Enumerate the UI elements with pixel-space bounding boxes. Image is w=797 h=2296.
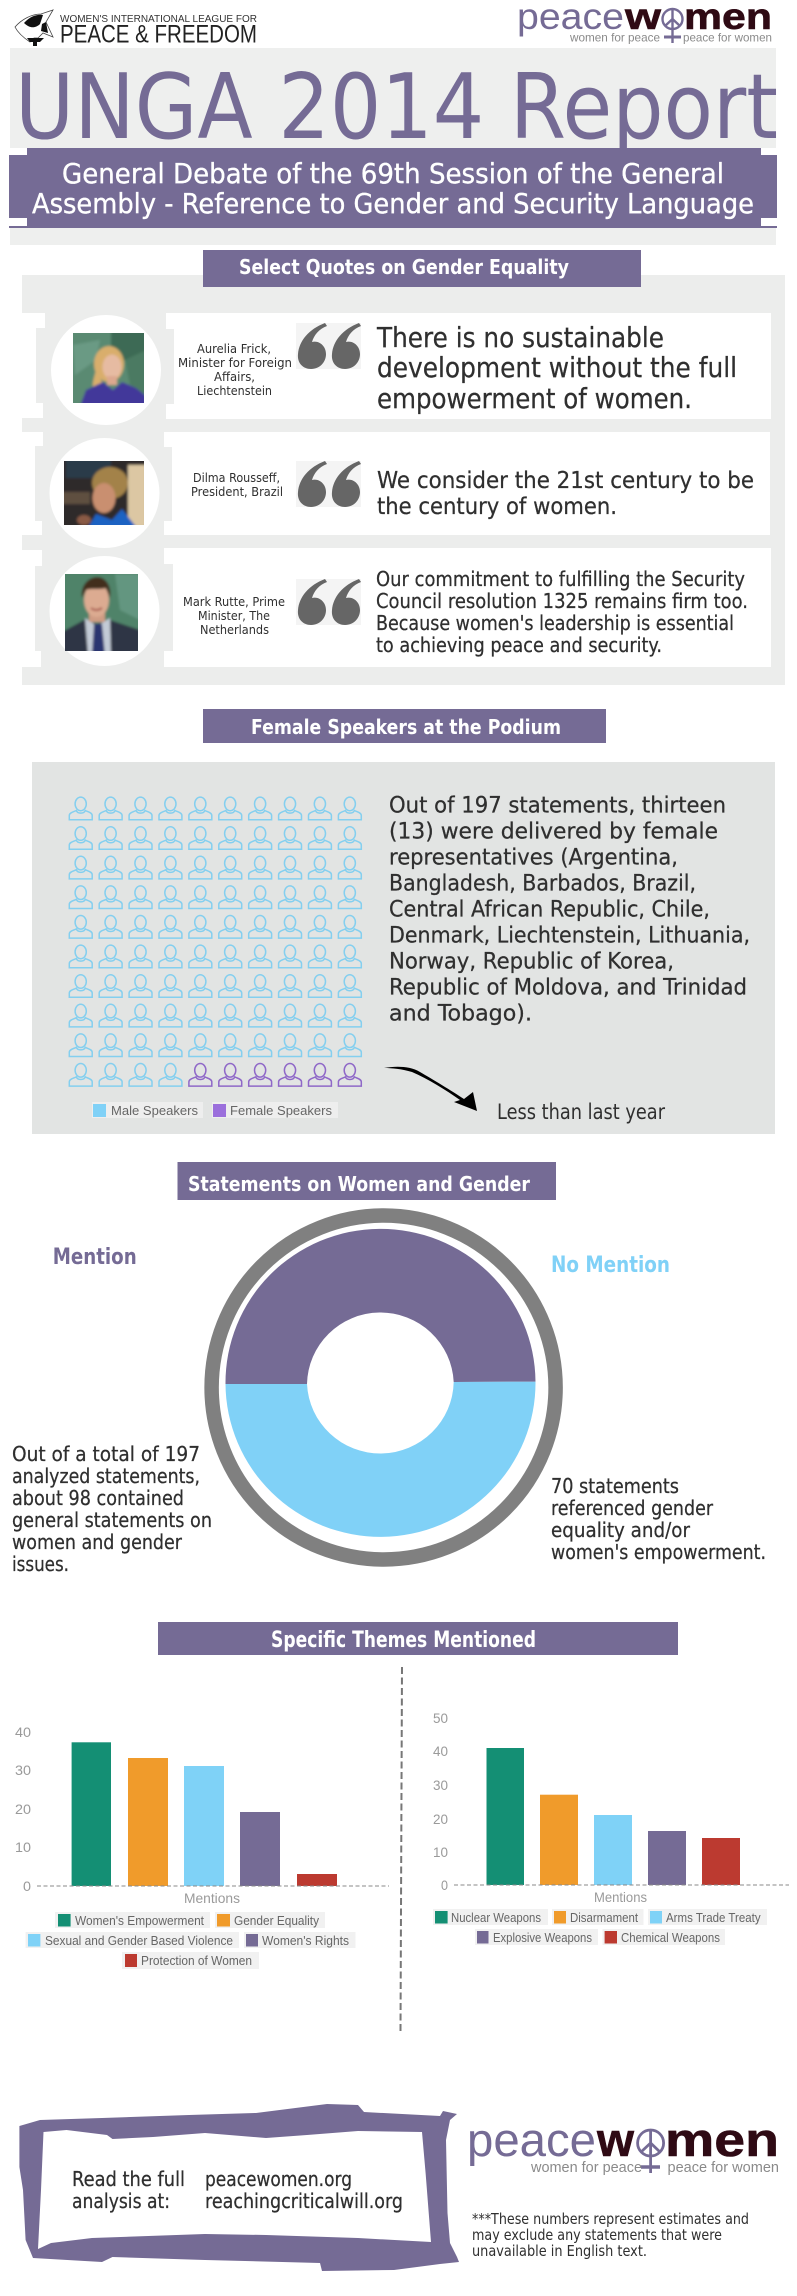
logo: peacewomen top: [517, 0, 772, 44]
bar chart: themes left: Mentions: [184, 1890, 240, 1906]
axis labels: 40: [433, 1743, 448, 1759]
brush frame: read the full analysis: analysis at:: [72, 2189, 170, 2213]
logo: peacewomen bottom: w: [596, 2113, 634, 2166]
quote text: the century of women.: [377, 494, 617, 520]
speaker name: Netherlands: [200, 623, 269, 637]
photo: Aurelia Frick: [73, 333, 144, 403]
text: female representatives: and Tobago).: [389, 1002, 532, 1027]
quote row: Dilma Rousseff: [22, 432, 770, 548]
text: total analyzed statements: Out of a total of 197: [12, 1442, 200, 1466]
quote text: development without the full: [377, 351, 737, 384]
quote text: We consider the 21st century to be: [377, 468, 754, 494]
text: total analyzed statements: [12, 1442, 212, 1576]
text: female representatives: Norway, Republic of Korea,: [389, 950, 674, 975]
legend: Women's Empowerment: [75, 1914, 204, 1928]
icon: quotation mark: [296, 323, 361, 369]
banner: subtitle: [9, 148, 778, 228]
legend: Gender Equality: [234, 1914, 320, 1928]
quote text: Council resolution 1325 remains firm too.: [376, 589, 748, 613]
legend: speakers: Male Speakers: [111, 1104, 198, 1118]
heading: select quotes: [203, 250, 641, 287]
text: female representatives: Republic of Moldova, and Trinidad: [389, 976, 747, 1001]
text: total analyzed statements: issues.: [12, 1552, 69, 1576]
panel: title background: [10, 48, 776, 245]
logo: peacewomen bottom: peace: [467, 2113, 596, 2166]
text: female representatives: Central African Republic, Chile,: [389, 898, 710, 923]
legend: [26, 1912, 355, 1969]
axis labels: 0: [23, 1878, 31, 1894]
text: female representatives: [389, 794, 750, 1027]
brush frame: read the full analysis: Read the full: [72, 2167, 185, 2191]
icon: quotation mark: [296, 579, 361, 625]
donut chart: [212, 1216, 556, 1560]
legend: Protection of Women: [141, 1954, 252, 1968]
logo: peacewomen bottom: peace for women: [668, 2159, 779, 2176]
arrow: down: [384, 1067, 477, 1111]
text: total analyzed statements: general statements on: [12, 1508, 212, 1532]
axis labels: [15, 1724, 31, 1894]
speaker name: Minister for Foreign: [178, 356, 292, 370]
quote row: Mark Rutte: [22, 548, 771, 667]
heading: female speakers: [203, 709, 606, 743]
pictogram: 100 speakers: [69, 797, 361, 1086]
axis labels: 0: [441, 1877, 448, 1893]
legend: Sexual and Gender Based Violence: [45, 1934, 233, 1948]
quote text: Our commitment to fulfilling the Security: [376, 567, 745, 591]
heading: statements: Statements on Women and Gender: [188, 1172, 530, 1196]
bar chart: themes right: [433, 1710, 789, 1945]
footnote: may exclude any statements that were: [472, 2226, 722, 2244]
speaker name: [191, 471, 283, 499]
brush frame: read the full analysis: peacewomen.org: [205, 2167, 352, 2191]
label: mention: Mention: [53, 1245, 137, 1270]
logo: peacewomen bottom: men: [665, 2113, 779, 2166]
axis labels: 40: [15, 1724, 31, 1740]
axis labels: 20: [15, 1801, 31, 1817]
text: female representatives: representatives (Argentina,: [389, 846, 678, 871]
quote row: Aurelia Frick: [22, 313, 771, 425]
heading: specific themes: [158, 1622, 678, 1655]
heading: statements: [178, 1162, 556, 1200]
text: less than last year: Less than last year: [497, 1100, 665, 1124]
speaker name: Minister, The: [198, 609, 270, 623]
bar chart: themes right: Mentions: [594, 1889, 647, 1905]
text: 70 statements: referenced gender: [551, 1496, 714, 1520]
footnote: unavailable in English text.: [472, 2242, 647, 2260]
text: 70 statements: [551, 1474, 766, 1564]
icon: quotation mark: [296, 461, 361, 507]
brush frame: read the full analysis: [19, 2104, 459, 2271]
legend: speakers: Female Speakers: [230, 1104, 332, 1118]
bars: [486, 1748, 740, 1885]
speaker name: President, Brazil: [191, 485, 283, 499]
speaker name: Dilma Rousseff,: [193, 471, 280, 485]
legend: [433, 1909, 767, 1945]
axis labels: 50: [433, 1710, 448, 1726]
quote text: empowerment of women.: [377, 382, 692, 415]
icon: peace and female symbol: [638, 2130, 664, 2173]
quote text: [376, 321, 737, 415]
quote text: [377, 468, 754, 520]
text: female representatives: (13) were delivered by female: [389, 820, 718, 845]
text: female representatives: Bangladesh, Barbados, Brazil,: [389, 872, 696, 897]
photo: Mark Rutte: [65, 574, 138, 651]
speaker name: Affairs,: [214, 370, 255, 384]
panel: quotes background: [22, 275, 785, 685]
text: total analyzed statements: analyzed statements,: [12, 1464, 200, 1488]
text: total analyzed statements: about 98 contained: [12, 1486, 184, 1510]
quote text: to achieving peace and security.: [376, 633, 662, 657]
legend: Disarmament: [570, 1911, 638, 1925]
brush frame: read the full analysis: reachingcriticalwill.org: [205, 2189, 403, 2213]
quote text: [376, 567, 748, 657]
text: 70 statements: women's empowerment.: [551, 1540, 766, 1564]
quote text: There is no sustainable: [376, 321, 664, 354]
speaker name: Aurelia Frick,: [197, 342, 271, 356]
label: no mention: No Mention: [551, 1253, 670, 1278]
logo: Women's International League for Peace & Freedom: [15, 10, 257, 48]
speaker name: Liechtenstein: [197, 384, 272, 398]
bar chart: themes left: [15, 1724, 389, 1969]
speaker name: [178, 342, 292, 398]
footnote: ***These numbers represent estimates and: [472, 2210, 749, 2228]
axis labels: 30: [15, 1762, 31, 1778]
axis labels: 10: [15, 1839, 31, 1855]
panel: female speakers: [32, 762, 775, 1134]
logo: Women's International League for Peace & Freedom: WOMEN'S INTERNATIONAL LEAGUE FOR: [60, 13, 257, 25]
legend: Women's Rights: [262, 1934, 349, 1948]
legend: Chemical Weapons: [621, 1931, 720, 1945]
logo: peacewomen bottom: women for peace: [530, 2159, 642, 2176]
axis labels: 20: [433, 1811, 448, 1827]
bars: [72, 1742, 337, 1886]
icon: peace and female symbol: [662, 9, 682, 43]
legend: Explosive Weapons: [493, 1931, 592, 1945]
banner: subtitle: Assembly - Reference to Gender and Security Language: [32, 187, 754, 220]
legend: speakers: [92, 1102, 338, 1118]
text: 70 statements: equality and/or: [551, 1518, 691, 1542]
axis labels: [433, 1710, 448, 1893]
speaker name: Mark Rutte, Prime: [183, 595, 285, 609]
heading: specific themes: Specific Themes Mentioned: [271, 1628, 536, 1653]
text: 70 statements: 70 statements: [551, 1474, 679, 1498]
footnote: [472, 2210, 749, 2260]
logo: peacewomen bottom: [467, 2113, 779, 2176]
logo: peacewomen top: women for peace: [569, 30, 660, 44]
axis labels: 10: [433, 1844, 448, 1860]
quote text: Because women's leadership is essential: [376, 611, 734, 635]
heading: female speakers: Female Speakers at the Podium: [251, 715, 561, 739]
heading: select quotes: Select Quotes on Gender Equality: [239, 255, 569, 279]
legend: Nuclear Weapons: [451, 1911, 541, 1925]
text: female representatives: Out of 197 statements, thirteen: [389, 794, 726, 819]
speaker name: [183, 595, 285, 637]
icon: dove: [15, 10, 53, 46]
logo: Women's International League for Peace & Freedom: PEACE & FREEDOM: [60, 20, 257, 48]
text: total analyzed statements: women and gender: [12, 1530, 183, 1554]
photo: Dilma Rousseff: [64, 461, 144, 525]
text: female representatives: Denmark, Liechtenstein, Lithuania,: [389, 924, 750, 949]
banner: subtitle: General Debate of the 69th Session of the General: [62, 157, 724, 190]
legend: Arms Trade Treaty: [666, 1911, 761, 1925]
logo: peacewomen top: peace for women: [683, 30, 772, 44]
axis labels: 30: [433, 1777, 448, 1793]
